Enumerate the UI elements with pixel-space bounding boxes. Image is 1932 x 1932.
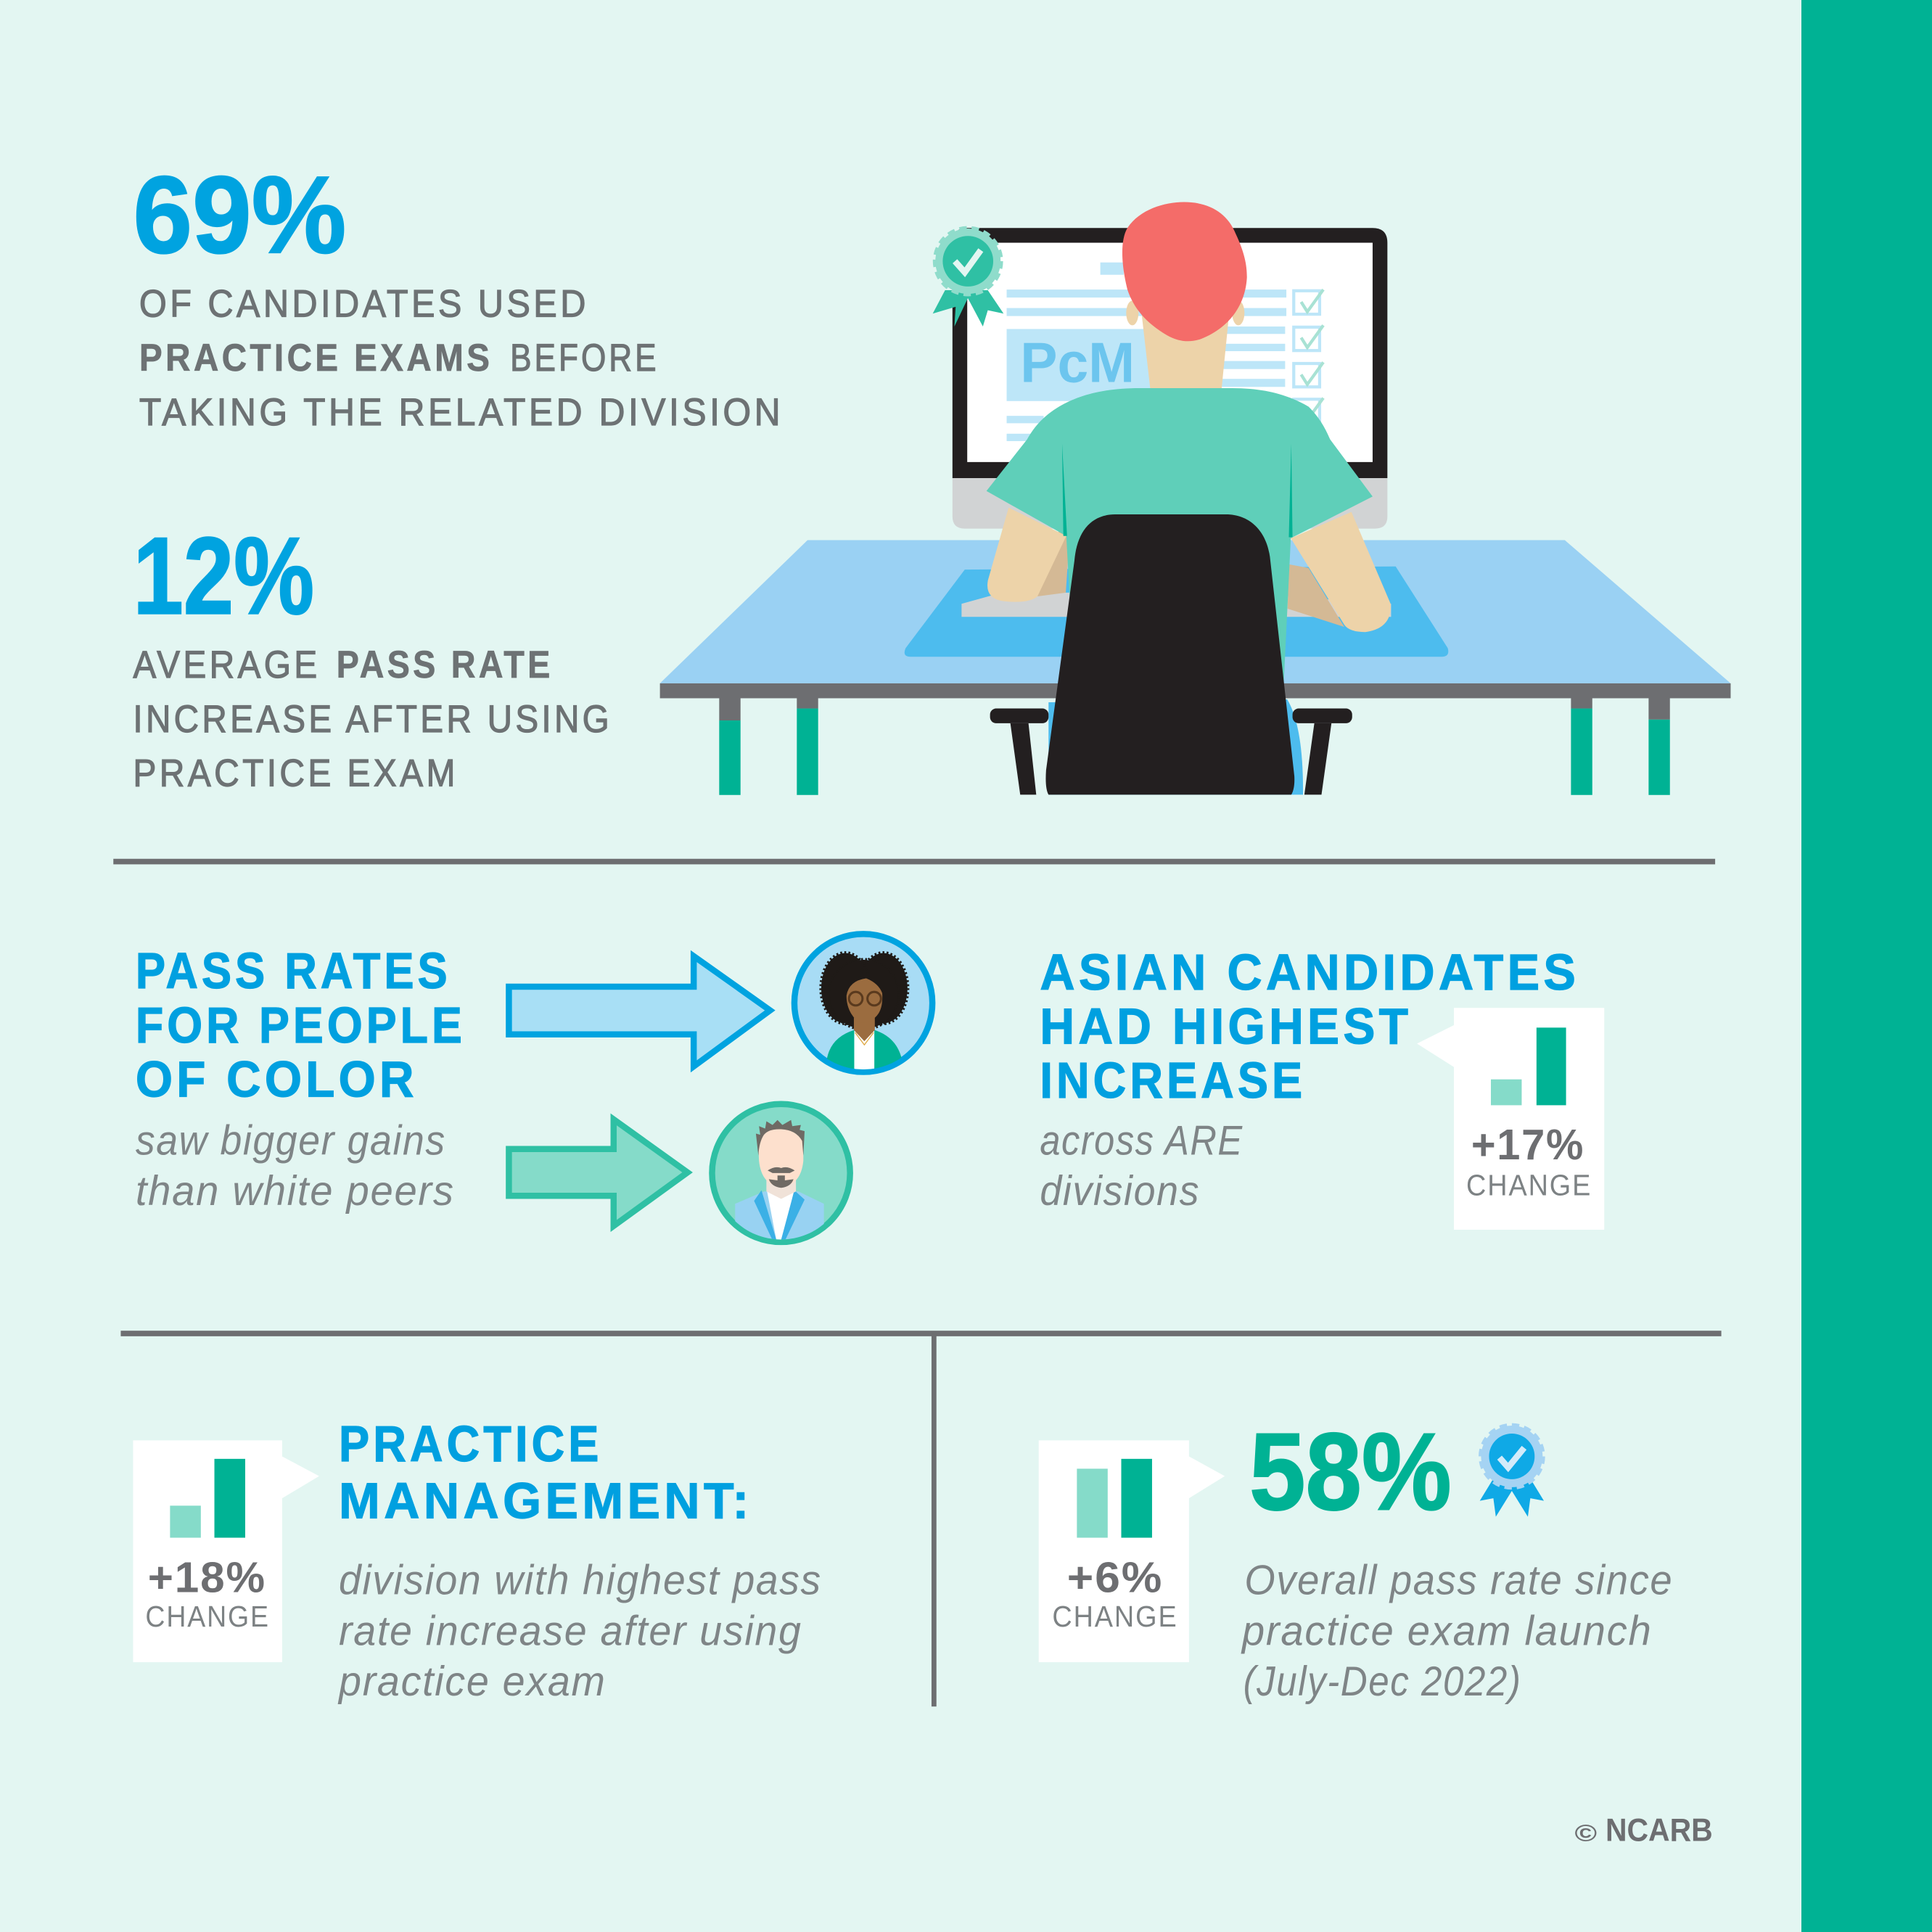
heading: Asian candidates: HAD HIGHEST [1040,998,1412,1054]
arrow: blue [509,956,770,1066]
stat: 69 percent: TAKING THE RELATED DIVISION [139,391,784,434]
icon: man avatar [712,1104,850,1244]
heading: Asian candidates [1040,944,1579,1214]
stat: 12 percent: PRACTICE EXAM [133,752,459,795]
heading: pass rates for people of color [136,942,466,1214]
stat: 58 percent [1241,1410,1673,1705]
vertical divider [932,1333,937,1706]
callout: +17% change: CHANGE [1466,1168,1592,1201]
monitor [953,228,1387,529]
chair [990,514,1352,794]
stat: 12 percent: PASS RATE [337,644,554,686]
desk [660,540,1730,795]
callout: +6% change [1039,1440,1225,1662]
heading: practice management [337,1415,822,1705]
copyright: © [1574,1820,1597,1846]
stat: 12 percent: AVERAGE [133,644,321,686]
callout: +18% change: +18% [148,1553,266,1601]
person [987,202,1391,794]
callout: +18% change [133,1440,319,1662]
divider [120,1331,1722,1336]
stat: 12 percent: 12% [133,515,314,638]
callout: +6% change: +6% [1067,1553,1163,1601]
icon: woman avatar [794,934,932,1072]
heading: practice management: PRACTICE [339,1415,602,1472]
heading: practice management: rate increase after using [339,1608,802,1654]
stat: 69 percent [133,154,784,434]
stat: 69 percent: PRACTICE EXAMS [139,337,493,379]
heading: Asian candidates: ASIAN CANDIDATES [1040,944,1579,1000]
heading: Asian candidates: across ARE [1040,1117,1244,1164]
icon: blue ribbon badge [1480,1425,1544,1517]
stat: 69 percent: 69% [133,154,346,276]
callout: +6% change: CHANGE [1052,1600,1178,1633]
stat: 58 percent: Overall pass rate since [1244,1558,1673,1604]
right green band [1801,0,1932,1932]
divider [113,859,1715,864]
stat: 58 percent: 58% [1249,1410,1452,1533]
stat: 58 percent: (July-Dec 2022) [1244,1658,1521,1705]
heading: Asian candidates: INCREASE [1040,1052,1306,1109]
heading: practice management: MANAGEMENT: [339,1472,753,1529]
copyright: NCARB [1606,1812,1713,1848]
callout: +17% change [1417,1008,1604,1230]
monitor: PcM [1020,330,1135,394]
arrow: green [509,1119,688,1226]
heading: Asian candidates: divisions [1040,1168,1200,1214]
heading: pass rates for people of color: saw bigger gains [136,1117,446,1164]
heading: pass rates for people of color: PASS RATES [136,942,451,999]
stat: 58 percent: practice exam launch [1241,1608,1652,1654]
stat: 69 percent: BEFORE [510,337,659,379]
heading: pass rates for people of color: than white peers [136,1168,455,1214]
heading: pass rates for people of color: FOR PEOPLE [136,997,466,1053]
heading: practice management: division with highest pass [339,1558,822,1604]
heading: practice management: practice exam [337,1658,607,1705]
stat: 12 percent: INCREASE AFTER USING [133,698,612,741]
heading: pass rates for people of color: OF COLOR [136,1051,418,1108]
callout: +18% change: CHANGE [145,1600,270,1633]
callout: +17% change: +17% [1471,1120,1584,1169]
stat: 12 percent [133,515,612,795]
icon: teal ribbon badge [933,228,1003,326]
illustration: person at desk [660,202,1730,795]
stat: 69 percent: OF CANDIDATES USED [139,282,589,325]
